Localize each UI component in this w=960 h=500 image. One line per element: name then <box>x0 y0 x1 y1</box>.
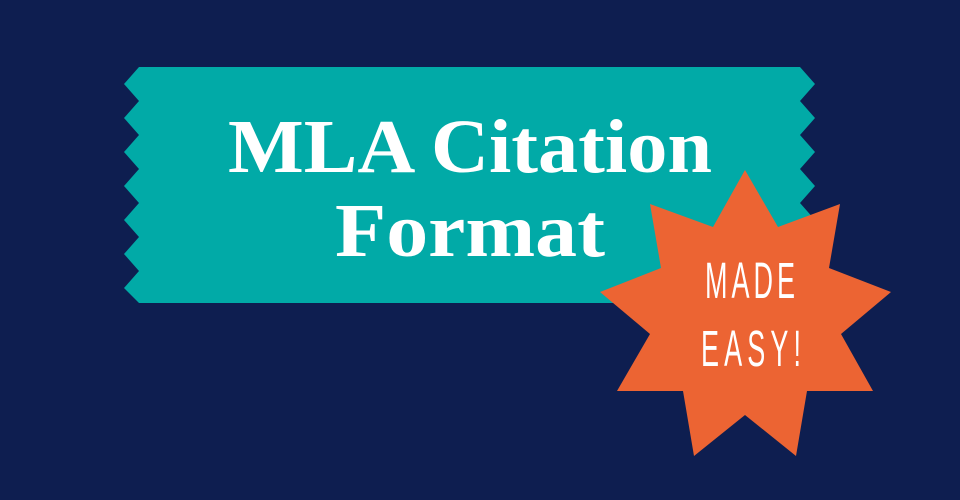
title <box>228 105 712 273</box>
ribbon banner <box>124 67 815 303</box>
title: MLA Citation <box>228 105 712 189</box>
badge text <box>701 252 801 377</box>
starburst badge <box>600 170 891 456</box>
title: Format <box>335 189 605 273</box>
badge text: MADE <box>705 252 795 309</box>
badge text: EASY! <box>701 320 801 377</box>
